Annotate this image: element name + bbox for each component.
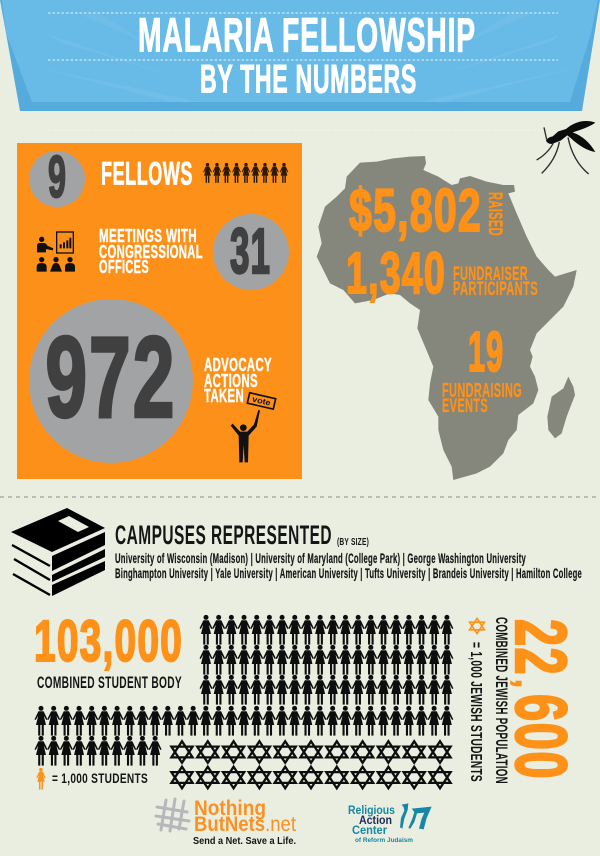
logo: Religious Action Center: [348, 803, 432, 844]
stat: 9 fellows: [29, 144, 288, 210]
stat: dollars raised: RAISED: [484, 192, 505, 236]
stat: combined Jewish population: [492, 617, 580, 784]
stat: fundraiser participants: PARTICIPANTS: [453, 279, 538, 300]
icon: voter with sign: vote: [251, 395, 272, 408]
pictogram: students: [34, 615, 453, 766]
stat: fundraising events: 19: [468, 320, 504, 384]
banner: [0, 0, 600, 111]
stat: 31 meetings: 31: [230, 215, 271, 287]
stat: 31 meetings: CONGRESSIONAL: [99, 241, 203, 262]
stat: 972 advocacy actions: TAKEN: [204, 385, 244, 406]
stat: 31 meetings: OFFICES: [99, 256, 149, 277]
stat: 972 advocacy actions: [29, 299, 276, 463]
logo: Religious Action Center: of Reform Judaism: [355, 838, 413, 844]
stat: 972 advocacy actions: 972: [46, 314, 176, 442]
legend: Jewish students: [467, 618, 484, 782]
logo: Religious Action Center: Action: [359, 815, 392, 827]
icon: presenter and audience: [37, 232, 75, 272]
stat: 31 meetings: MEETINGS WITH: [99, 225, 197, 246]
stat: fundraiser participants: 1,340: [346, 241, 446, 306]
stat: fundraising events: EVENTS: [442, 396, 488, 417]
panel: fellowship stats: [17, 143, 302, 479]
legend: students: [36, 768, 148, 790]
stat: 9 fellows: FELLOWS: [101, 156, 193, 192]
map: Africa fundraising stats: [317, 156, 577, 480]
map shape: [317, 156, 577, 480]
stat: combined Jewish population: 22: [500, 619, 580, 676]
logo: Nothing But Nets: Send a Net. Save a Life.: [193, 835, 296, 847]
section: campuses represented: (BY SIZE): [337, 536, 369, 548]
stat: fundraising events: FUNDRAISING: [442, 380, 522, 402]
stat: combined student body: [34, 609, 183, 692]
stat: combined Jewish population: ,: [508, 679, 546, 689]
logo: Nothing But Nets: [156, 797, 296, 847]
pictogram: Jewish students: [171, 741, 451, 788]
icon: mosquito: [537, 121, 595, 174]
stat: 972 advocacy actions: ADVOCACY: [204, 354, 272, 375]
icon: voter with sign: [231, 393, 276, 462]
logo: Religious Action Center: Center: [352, 825, 387, 837]
stat: combined student body: COMBINED STUDENT BODY: [37, 673, 182, 692]
icon: Hebrew emblem: [400, 803, 432, 829]
stat: combined Jewish population: 600: [500, 694, 580, 780]
stat: combined student body: 103,000: [34, 609, 183, 674]
stat: fundraiser participants: FUNDRAISER: [453, 264, 528, 285]
stat: dollars raised: $5,802: [349, 177, 482, 244]
stat: 31 meetings: [37, 214, 289, 290]
logo: Religious Action Center: Religious: [348, 805, 395, 817]
stat: fundraising events: [442, 320, 522, 417]
heading: CAMPUSES REPRESENTED: [115, 520, 332, 550]
logo: Nothing But Nets: ButNets.net: [194, 813, 296, 836]
subtitle: BY THE NUMBERS: [200, 58, 417, 102]
stat: 9 fellows: 9: [48, 144, 67, 210]
icon: stack of books: [11, 508, 105, 596]
section: campuses represented: [11, 508, 582, 596]
logo: Nothing But Nets: Nothing: [194, 797, 266, 820]
legend: students: = 1,000 STUDENTS: [52, 770, 148, 786]
stat: 972 advocacy actions: ACTIONS: [204, 370, 258, 391]
icon: net: [156, 799, 189, 831]
icon: nine fellows: [203, 163, 288, 183]
